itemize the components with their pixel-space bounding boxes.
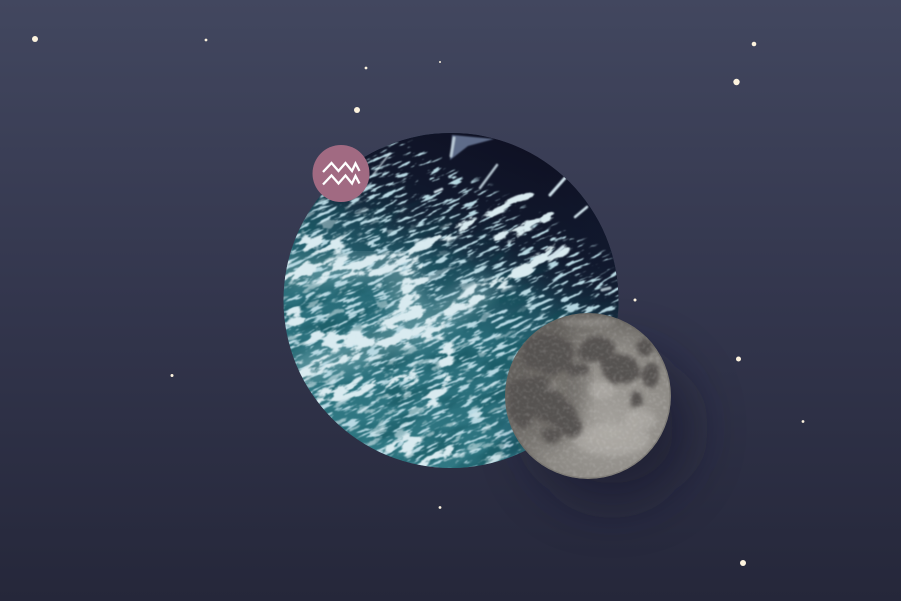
foam specks: [284, 140, 618, 468]
lunar highlands: [546, 318, 656, 456]
moon: [505, 313, 671, 479]
ocean planet: [284, 133, 618, 468]
foam texture: [284, 192, 571, 468]
moon shadow: [532, 353, 692, 503]
soft foam glow: [287, 262, 480, 372]
dark water patches: [284, 192, 546, 468]
badge: Aquarius sign: [312, 145, 370, 202]
deep water shading: [322, 133, 611, 291]
icon: Aquarius waves: [323, 163, 360, 184]
lunar maria: [508, 334, 659, 443]
moon limb: [506, 314, 670, 478]
soft dark hemisphere: [510, 323, 586, 447]
moon surface texture: [506, 314, 668, 477]
foam streaks, dark water: [373, 135, 610, 290]
stars: [32, 36, 804, 566]
